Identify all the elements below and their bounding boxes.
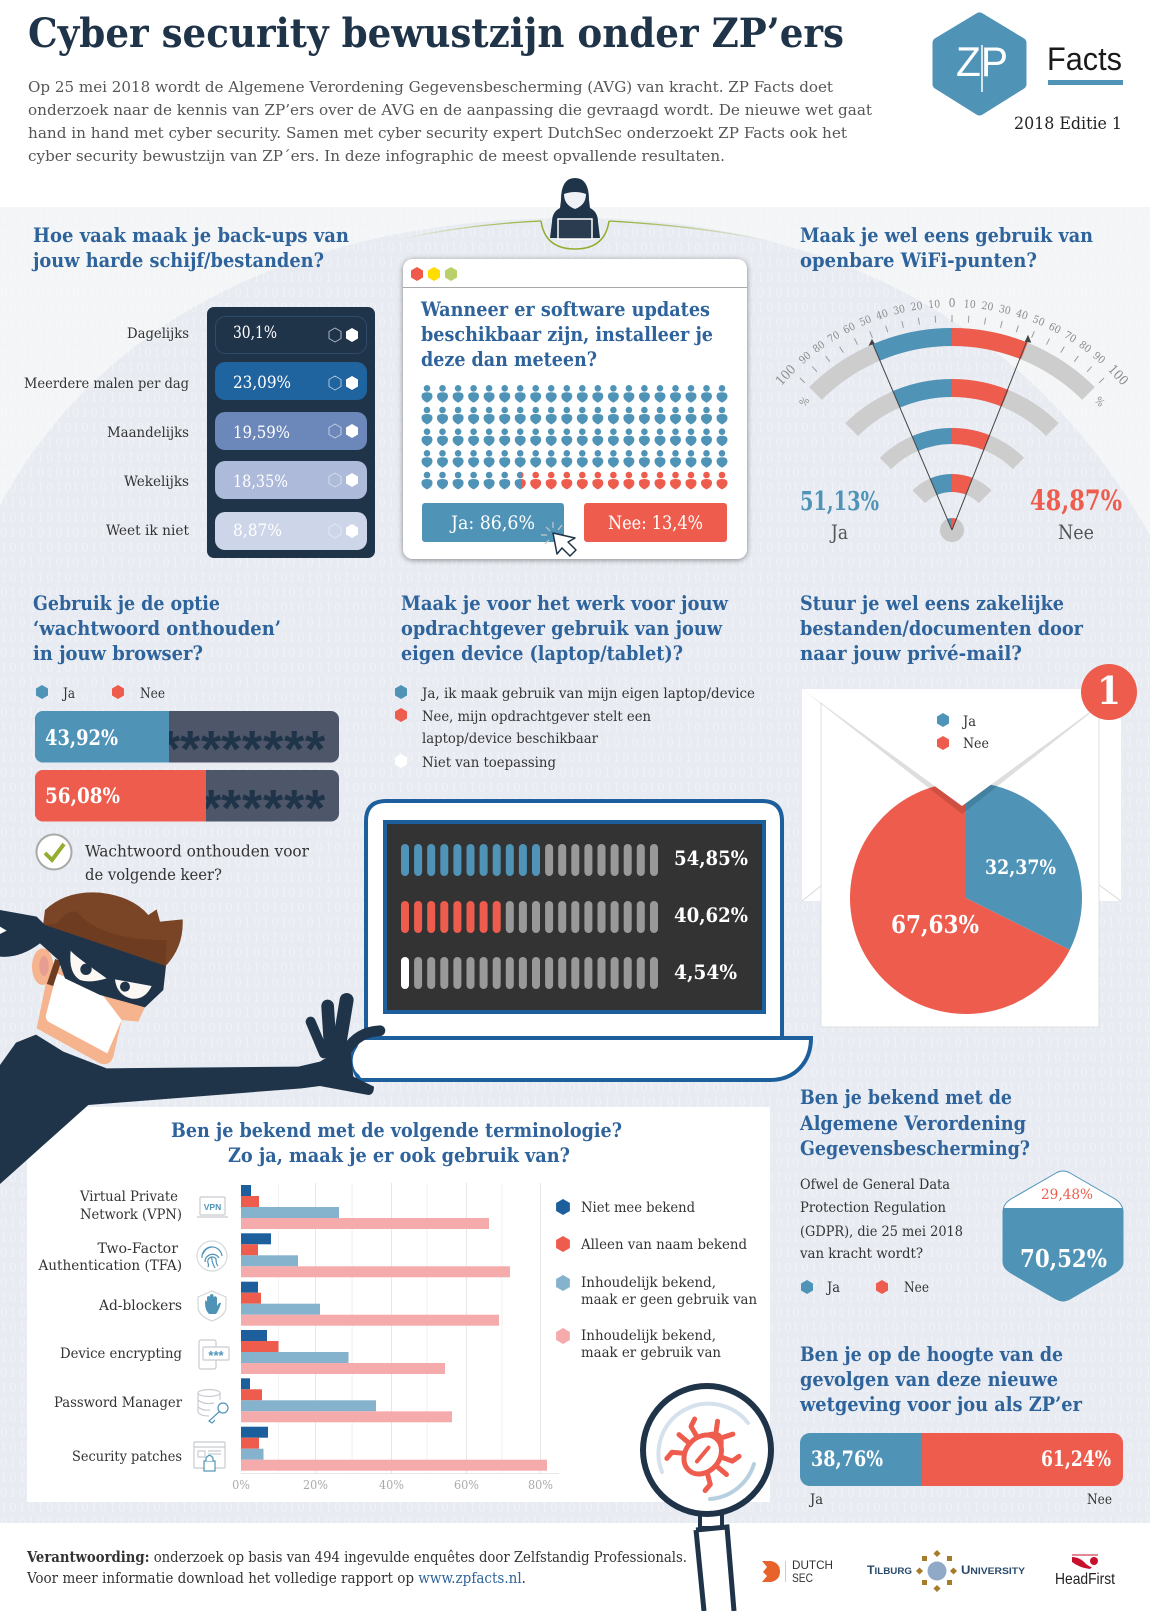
heading: wachtwoord onthouden: ‘wachtwoord onthouden’	[33, 616, 281, 640]
heading: eigen device: Maak je voor het werk voor jouw	[401, 591, 729, 615]
heading: WiFi	[800, 223, 1093, 272]
grey arcs	[816, 337, 1088, 497]
icon: cursor	[541, 522, 576, 556]
scale labels: 60	[1047, 321, 1063, 337]
magnifier handle	[696, 1512, 734, 1611]
row: 40,62%: 40,62%	[674, 903, 748, 927]
pie chart	[850, 782, 1082, 1014]
heading: prive-mail	[800, 591, 1083, 665]
scale labels: 90	[797, 350, 814, 367]
row: Meerdere malen per dag: Meerdere malen per dag	[24, 376, 189, 392]
text block: GDPR: Protection Regulation	[800, 1200, 946, 1216]
footer: verantwoording	[26, 1549, 687, 1587]
icon: shield hand	[198, 1291, 226, 1321]
legend: eigen device: Ja, ik maak gebruik van mijn eigen laptop/device	[420, 686, 755, 702]
scale labels: 10	[963, 298, 976, 311]
heading: AVG: Ben je bekend met de	[800, 1085, 1012, 1109]
footer: verantwoording: Voor meer informatie download het volledige rapport op www.zpfacts.nl .	[26, 1571, 526, 1587]
envelope flap	[802, 689, 1121, 814]
row: Dagelijks	[127, 316, 366, 354]
row: 4,54%: 4,54%	[674, 960, 737, 984]
button: Ja: Ja: 86,6%	[449, 513, 535, 534]
intro text: onderzoek naar de kennis van ZP’ers over de AVG en de aanpassing die gevraagd wordt. De nieuwe wet gaat	[28, 101, 873, 119]
bar: 56,08%	[35, 770, 339, 822]
value: Ja	[800, 487, 879, 544]
stacked bar: wetgeving	[800, 1433, 1123, 1508]
needles	[870, 336, 1030, 530]
row: VPN	[79, 1185, 489, 1229]
laptop chart: eigen device	[352, 801, 811, 1080]
hexagon chart: GDPR: 29,48%	[1041, 1187, 1093, 1203]
axis labels: 20%	[303, 1477, 328, 1492]
row: Security patches: Security patches	[72, 1449, 182, 1465]
stacked bar: wetgeving: Ja	[808, 1492, 823, 1508]
red arcs	[952, 337, 1024, 486]
heading: AVG: Algemene Verordening	[799, 1111, 1026, 1135]
icon: fingerprint	[197, 1241, 227, 1271]
bar: 43,92%: ********	[160, 721, 326, 779]
bar: 43,92%	[35, 711, 339, 762]
badge: 1: 1	[1097, 668, 1121, 713]
legend: GDPR	[801, 1280, 929, 1296]
axis labels: 60%	[454, 1477, 479, 1492]
row: Maandelijks: Maandelijks	[107, 425, 189, 441]
row: Device encrypting	[60, 1330, 445, 1374]
row: Ad-blockers	[98, 1282, 499, 1326]
bar: 56,08%: ******	[201, 780, 326, 838]
intro text: hand in hand met cyber security. Samen met cyber security expert DutchSec onderzoekt ZP Facts ook het	[28, 124, 848, 142]
row: TFA: Authentication (TFA)	[37, 1258, 182, 1274]
legend: wachtwoord: Nee	[140, 686, 165, 702]
row: VPN: Virtual Private	[79, 1189, 178, 1205]
stacked bar: wetgeving: 38,76%	[811, 1446, 883, 1471]
text block: GDPR: van kracht wordt?	[799, 1246, 923, 1262]
legend: terminologie: maak er geen gebruik van	[581, 1292, 757, 1308]
legend: terminologie	[556, 1199, 757, 1361]
row: Weet ik niet	[106, 512, 367, 550]
legend: prive-mail: Nee	[963, 736, 989, 752]
chart grid	[241, 1183, 559, 1474]
scale labels: 80	[811, 339, 828, 356]
row: Wekelijks: Wekelijks	[124, 474, 189, 490]
stacked bar: wetgeving: Nee	[1087, 1492, 1112, 1508]
scale labels: 90	[1090, 350, 1107, 367]
legend: terminologie: Alleen van naam bekend	[580, 1237, 747, 1253]
illustration: magnifying glass with bug	[643, 1386, 771, 1611]
logo: Tilburg University: UNIVERSITY	[961, 1563, 1026, 1577]
value: 32,37%: 32,37%	[985, 855, 1056, 879]
bar: 43,92%: 43,92%	[45, 725, 118, 750]
logo: DutchSec: DUTCH	[792, 1558, 833, 1572]
text block: GDPR: (GDPR), die 25 mei 2018	[800, 1224, 963, 1240]
legend: eigen device: laptop/device beschikbaar	[422, 731, 599, 747]
heading: terminologie: Ben je bekend met de volgende terminologie?	[171, 1118, 622, 1142]
heading: wachtwoord onthouden: in jouw browser?	[33, 641, 203, 665]
chart: WiFi gauge	[773, 296, 1131, 544]
heading: eigen device: opdrachtgever gebruik van jouw	[401, 616, 723, 640]
icon: bug	[662, 1408, 749, 1494]
scale labels: 40	[1014, 307, 1029, 323]
heading: wachtwoord onthouden: Gebruik je de optie	[33, 591, 220, 615]
axis labels: 40%	[379, 1477, 404, 1492]
row: Dagelijks: 30,1%	[233, 323, 277, 343]
legend: prive-mail	[937, 713, 989, 752]
panel: back-ups frequency	[24, 307, 375, 558]
logo: DutchSec	[762, 1558, 833, 1585]
checkbox: wachtwoord onthouden	[36, 834, 309, 884]
scale labels: %	[797, 395, 812, 409]
value: Ja: 51,13%	[800, 487, 879, 517]
logo: HeadFirst	[1055, 1555, 1115, 1588]
heading: back-ups: Hoe vaak maak je back-ups van	[33, 223, 349, 247]
icon: database and key	[198, 1390, 228, 1423]
row: 40,62%	[401, 901, 748, 933]
button: Nee: Nee: 13,4%	[608, 513, 703, 534]
heading: eigen device	[401, 591, 729, 665]
legend: GDPR: Nee	[904, 1280, 929, 1296]
legend: eigen device	[395, 685, 755, 771]
heading: prive-mail: Stuur je wel eens zakelijke	[800, 591, 1064, 615]
laptop screen	[385, 822, 764, 1012]
bar: 56,08%: 56,08%	[45, 783, 120, 808]
logo: Tilburg University: TILBURG	[867, 1563, 912, 1577]
envelope chart: prive-mail	[802, 664, 1137, 1027]
scale labels: 20	[910, 300, 924, 314]
stacked bar: wetgeving: 61,24%	[1041, 1446, 1111, 1471]
scale ticks	[800, 315, 1104, 383]
scale labels: 50	[1031, 313, 1046, 329]
window dots	[411, 267, 457, 281]
legend: terminologie: Inhoudelijk bekend,	[581, 1275, 716, 1291]
legend: terminologie: Niet mee bekend	[581, 1200, 695, 1216]
row: Security patches	[72, 1427, 547, 1471]
heading: software updates: beschikbaar zijn, installeer je	[421, 322, 713, 346]
scale labels: 20	[980, 300, 994, 314]
heading: WiFi: Maak je wel eens gebruik van	[800, 223, 1093, 247]
title: Cyber security bewustzijn onder ZP’ers	[28, 10, 844, 57]
value: Nee: 48,87%	[1030, 484, 1122, 517]
pictogram: people grid 86,6%	[421, 385, 728, 490]
row: Meerdere malen per dag	[24, 362, 367, 400]
hexagon chart: GDPR	[1003, 1171, 1123, 1301]
footer: verantwoording: Verantwoording: onderzoek op basis van 494 ingevulde enquêtes door Zelfstandig Professionals.	[26, 1549, 687, 1566]
scale labels: 70	[826, 329, 842, 346]
icon: device encrypting: ***	[208, 1348, 225, 1363]
heading: eigen device: eigen device (laptop/tablet)?	[401, 641, 683, 665]
heading: back-ups: jouw harde schijf/bestanden?	[31, 248, 324, 272]
legend: GDPR: Ja	[825, 1280, 840, 1296]
heading: prive-mail: bestanden/documenten door	[800, 616, 1083, 640]
icon: hacker at laptop	[400, 178, 770, 249]
value: Nee: Nee	[1058, 520, 1094, 544]
scale labels: 80	[1076, 339, 1093, 356]
axis labels: 0%	[232, 1477, 250, 1492]
heading: terminologie	[171, 1118, 622, 1167]
legend: wachtwoord: Ja	[61, 686, 75, 702]
heading: AVG	[799, 1085, 1030, 1160]
row: 54,85%	[401, 844, 748, 876]
heading: software updates	[420, 297, 713, 371]
scale labels: 30	[892, 303, 906, 317]
legend: eigen device: Niet van toepassing	[422, 755, 556, 771]
row: Device encrypting: Device encrypting	[60, 1346, 182, 1362]
envelope back	[802, 689, 1121, 901]
checkbox: wachtwoord onthouden: de volgende keer?	[85, 866, 222, 884]
value: Ja: Ja	[829, 520, 848, 544]
axis labels	[232, 1477, 553, 1492]
panel: terminologie	[27, 1107, 770, 1502]
heading: prive-mail: naar jouw privé-mail?	[800, 641, 1022, 665]
value: 67,63%: 67,63%	[891, 910, 979, 939]
logo: ZP Facts: 2018 Editie 1	[1014, 114, 1122, 133]
scale labels: 10	[928, 298, 941, 311]
scale labels: 70	[1062, 329, 1078, 346]
icon: VPN laptop	[197, 1197, 228, 1217]
gauge hub	[940, 518, 964, 542]
logo: ZP Facts: ZP	[956, 38, 1008, 85]
badge: 1	[1081, 664, 1137, 720]
intro text	[28, 78, 873, 165]
scale labels: 0	[949, 296, 956, 310]
row: Weet ik niet: 8,87%	[233, 521, 282, 541]
text block: GDPR	[799, 1177, 963, 1262]
row: 4,54%	[401, 957, 737, 989]
hexagon chart: GDPR: 70,52%	[1020, 1244, 1107, 1273]
thief head	[0, 892, 183, 1064]
axis labels: 80%	[528, 1477, 553, 1492]
laptop lid	[366, 801, 782, 1038]
legend: prive-mail: Ja	[961, 714, 976, 730]
magnifier lens	[643, 1386, 771, 1514]
heading: WiFi: openbare WiFi-punten?	[800, 248, 1037, 272]
row: TFA	[37, 1233, 510, 1277]
icon: device encrypting	[199, 1340, 229, 1369]
row: Password Manager	[54, 1378, 452, 1422]
illustration: thief	[0, 892, 400, 1184]
scale labels: 40	[875, 307, 890, 323]
logo: DutchSec: SEC	[792, 1571, 813, 1585]
scale labels: 60	[841, 321, 857, 337]
heading: wetgeving: gevolgen van deze nieuwe	[800, 1367, 1058, 1391]
heading: software updates: deze dan meteen?	[421, 347, 597, 371]
letter	[821, 700, 1099, 1027]
panel: software updates window	[403, 259, 747, 559]
laptop corner over hand	[353, 1041, 400, 1078]
row: Wekelijks: 18,35%	[233, 472, 288, 492]
legend: terminologie: Inhoudelijk bekend,	[581, 1328, 716, 1344]
row: Maandelijks: 19,59%	[233, 423, 290, 443]
heading: wetgeving: Ben je op de hoogte van de	[800, 1342, 1063, 1366]
row: Wekelijks	[124, 461, 367, 499]
scale labels: %	[1092, 395, 1107, 409]
logo: HeadFirst: HeadFirst	[1055, 1571, 1115, 1588]
scale labels	[773, 296, 1131, 409]
laptop base	[352, 1038, 811, 1080]
scale labels: 30	[998, 303, 1012, 317]
heading: wachtwoord onthouden	[33, 591, 281, 665]
legend: eigen device: Nee, mijn opdrachtgever stelt een	[422, 709, 651, 725]
row: Ad-blockers: Ad-blockers	[98, 1298, 182, 1314]
heading: wetgeving	[799, 1342, 1082, 1416]
icon: VPN laptop: VPN	[204, 1202, 221, 1212]
heading: software updates: Wanneer er software updates	[420, 297, 710, 321]
heading: terminologie: Zo ja, maak je er ook gebruik van?	[228, 1143, 570, 1167]
logo: ZP Facts: Facts	[1047, 41, 1122, 77]
logo: Tilburg University	[867, 1550, 1026, 1592]
icon: browser lock	[194, 1442, 225, 1471]
checkbox: wachtwoord onthouden: Wachtwoord onthouden voor	[85, 842, 309, 860]
scale labels: 50	[858, 313, 873, 329]
row: VPN: Network (VPN)	[80, 1207, 182, 1223]
row: Meerdere malen per dag: 23,09%	[233, 373, 291, 393]
intro text: cyber security bewustzijn van ZP´ers. In deze infographic de meest opvallende resultaten.	[28, 147, 725, 165]
heading: wetgeving: wetgeving voor jou als ZP’er	[799, 1392, 1082, 1416]
row: Maandelijks	[107, 412, 367, 450]
intro text: Op 25 mei 2018 wordt de Algemene Verordening Gegevensbescherming (AVG) van kracht. ZP Facts doet	[28, 78, 834, 96]
button: Nee	[584, 503, 727, 542]
row: 54,85%: 54,85%	[674, 846, 748, 870]
legend: terminologie: maak er gebruik van	[581, 1345, 721, 1361]
legend: wachtwoord	[36, 685, 165, 702]
thief body and arm	[0, 1000, 380, 1184]
heading: AVG: Gegevensbescherming?	[800, 1136, 1030, 1160]
row: TFA: Two-Factor	[98, 1241, 179, 1257]
heading: back-ups	[31, 223, 349, 272]
row: Dagelijks: Dagelijks	[127, 326, 189, 342]
value: Nee	[1030, 484, 1122, 544]
button: Ja	[422, 503, 564, 542]
row: Weet ik niet: Weet ik niet	[106, 523, 189, 539]
scale labels: 100	[773, 362, 799, 389]
blue arcs	[877, 337, 952, 487]
row: Password Manager: Password Manager	[54, 1395, 183, 1411]
scale labels: 100	[1105, 362, 1131, 389]
logo: ZP Facts	[938, 18, 1123, 133]
text block: GDPR: Ofwel de General Data	[800, 1177, 951, 1193]
